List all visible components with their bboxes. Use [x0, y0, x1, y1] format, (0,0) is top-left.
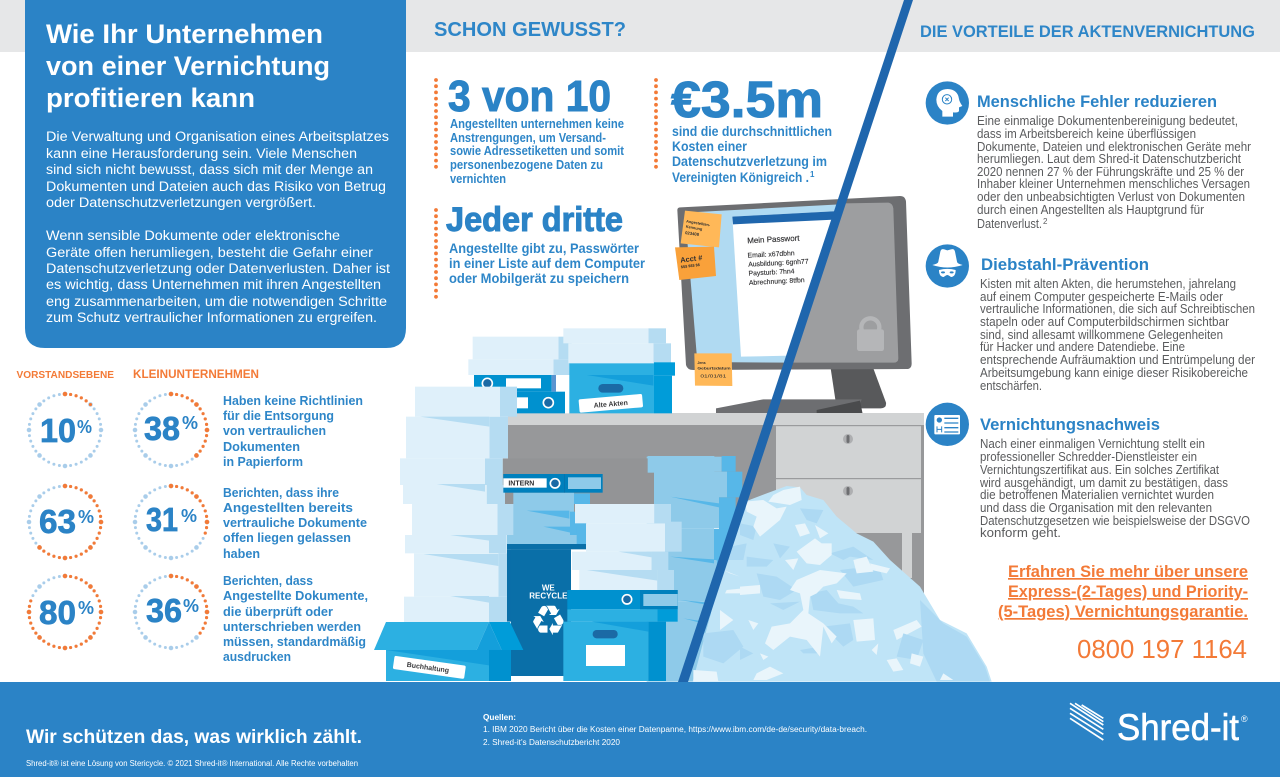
text: diebstahl [980, 277, 1255, 393]
fact: 3 von 10: Angestellten unternehmen keine [450, 116, 624, 131]
intro text: Dokumenten und Dateien auch das Risiko von Betrug [46, 179, 386, 194]
intro text: zum Schutz vertraulicher Informationen zu ergreifen. [46, 310, 377, 325]
stat text: ausdrucken: ausdrucken [223, 649, 291, 664]
text: diebstahl: entschärfen. [980, 379, 1042, 393]
box: buchhaltung [374, 622, 523, 681]
logo: shred-it: Shred-it [1117, 707, 1240, 748]
password document [732, 211, 847, 357]
stat: 36 percent: % [183, 596, 199, 616]
text: vernichtungsnachweis: konform geht. [980, 526, 1061, 540]
fact: 3.5m: Vereinigten Königreich . [672, 169, 809, 185]
intro text: kann eine Herausforderung sein. Viele Menschen [46, 146, 357, 161]
stat: 63 percent: % [78, 507, 94, 527]
text: menschliche fehler: Datenverlust. [977, 217, 1042, 231]
call to action: Express-(2-Tages) und Priority- [1008, 582, 1248, 601]
password document: Abrechnung: 8tfbn [749, 277, 805, 287]
text: menschliche fehler: durch einen Angestellten als Hauptgrund für [977, 203, 1204, 217]
stat text: offen liegen [223, 485, 367, 561]
fact: 3 von 10: sowie Adressetiketten und somit [450, 143, 625, 158]
text: diebstahl: vertrauliche Informationen, die sich auf Schreibtischen [980, 302, 1255, 316]
sources: 2. Shred-it's Datenschutzbericht 2020 [483, 738, 621, 747]
column headings [16, 369, 259, 381]
logo: shred-it [1070, 703, 1248, 748]
stat: 31 percent [135, 486, 207, 558]
header band [0, 0, 1280, 52]
recycling bin: RECYCLE [529, 591, 568, 600]
text: vernichtungsnachweis: professioneller Schredder-Dienstleister ein [980, 450, 1197, 464]
sticky note: kennung [681, 211, 722, 247]
stat: 63 percent: 63 [39, 503, 76, 540]
intro text: Datenschutzverletzung oder Datenverlusten. Daher ist [46, 261, 390, 276]
panel: intro [25, 0, 406, 348]
column headings: KLEINUNTERNEHMEN [133, 369, 259, 381]
stat: 80 percent: % [78, 598, 94, 618]
stat text: ausdrucken: Berichten, dass [223, 573, 313, 588]
fact: 3.5m: Kosten einer [672, 138, 747, 154]
stat text: ausdrucken: unterschrieben werden [223, 619, 361, 634]
sources [483, 713, 867, 747]
text: vernichtungsnachweis: Vernichtungszertifikat aus. Ein solches Zertifikat [980, 463, 1219, 477]
stat text: ausdrucken [223, 573, 368, 664]
back paper stack [468, 337, 572, 375]
stat text: richtlinien [223, 393, 363, 469]
stat: 36 percent [135, 576, 207, 648]
intro text [46, 129, 390, 325]
stat text: ausdrucken: die überprüft oder [223, 604, 333, 619]
text: menschliche fehler: Eine einmalige Dokumentenbereinigung bedeutet, [977, 114, 1238, 128]
stat text: ausdrucken: Angestellte Dokumente, [223, 588, 368, 603]
sticky note: acct: $$$ $$$ $$ [681, 263, 701, 269]
text: menschliche fehler: herumliegen. Laut dem Shred-it Datenschutzbericht [977, 152, 1241, 166]
desk shadow block [503, 458, 654, 504]
rim and right side shreds [693, 543, 990, 682]
sticky note: geburtsdatum: Jens [697, 361, 706, 365]
text: vernichtungsnachweis: wird ausgehändigt, um damit zu bestätigen, dass [979, 476, 1228, 490]
call to action [998, 562, 1248, 621]
heading: schon gewusst: SCHON GEWUSST? [434, 19, 626, 41]
fact: 3.5m [656, 71, 832, 185]
monitor stand [831, 368, 886, 408]
copyright: Shred-it® ist eine Lösung von Stericycle. © 2021 Shred-it® International. Alle Rechte vorbehalten [26, 759, 358, 768]
illustration: stacks and boxes [374, 328, 714, 681]
box: unlabelled front [563, 590, 678, 681]
fact: 3 von 10: vernichten [450, 171, 506, 186]
centre shreds [740, 487, 890, 680]
stat text: richtlinien: von vertraulichen [223, 423, 326, 438]
sticky note: geburtsdatum [694, 353, 732, 386]
logo: shred-it: ® [1241, 714, 1248, 724]
text: menschliche fehler [977, 114, 1251, 231]
left paper stack [400, 387, 517, 622]
heading: vorteile: DIE VORTEILE DER AKTENVERNICHTUNG [920, 22, 1255, 41]
stat text: offen liegen: offen liegen gelassen [223, 530, 351, 545]
sources: 1. IBM 2020 Bericht über die Kosten einer Datenpanne, https://www.ibm.com/de-de/security/data-breach. [483, 725, 867, 734]
call to action: (5-Tages) Vernichtungsgarantie. [998, 602, 1248, 621]
sticky note: kennung: Angestellten- [686, 219, 711, 228]
sticky note: kennung: Kennung [685, 225, 703, 232]
call to action: Erfahren Sie mehr über unsere [1008, 562, 1248, 581]
stat text: ausdrucken: müssen, standardmäßig [223, 634, 366, 649]
text: diebstahl: für Hacker und andere Datendiebe. Eine [980, 340, 1185, 354]
text: vernichtungsnachweis: Nach einer einmaligen Vernichtung stellt ein [980, 437, 1205, 451]
sticky note: acct [675, 247, 716, 280]
phone number: 0800 197 1164 [1077, 634, 1247, 664]
binder: intern [503, 474, 603, 493]
icon: padlock [857, 318, 884, 351]
monitor frame [677, 196, 912, 370]
fact: jeder dritte: Jeder dritte [446, 201, 623, 239]
icon: certificate [926, 403, 969, 446]
text: menschliche fehler: Dokumente, Dateien und elektronischen Geräte mehr [977, 140, 1251, 154]
stat text: offen liegen: Angestellten bereits [223, 500, 353, 515]
password document: Email: x67dbhn [747, 250, 795, 260]
text: diebstahl: Kisten mit alten Akten, die herumstehen, jahrelang [980, 277, 1236, 291]
recycling bin [507, 544, 586, 676]
text: menschliche fehler: 2 [1043, 217, 1048, 226]
sticky note: kennung: 023408 [685, 230, 700, 237]
stat: 38 percent [135, 394, 207, 466]
intro text: eng zusammenarbeiten, um die notwendigen Schritte [46, 294, 387, 309]
fact: 3 von 10 [436, 72, 625, 186]
title: von einer Vernichtung [46, 51, 330, 81]
stat: 36 percent: 36 [146, 592, 182, 629]
mid stack [507, 493, 590, 544]
text: vernichtungsnachweis: die betroffenen Materialien vernichtet wurden [980, 488, 1214, 502]
tagline: Wir schützen das, was wirklich zählt. [26, 727, 362, 748]
sources: Quellen: [483, 713, 516, 722]
text: vernichtungsnachweis [979, 437, 1250, 540]
text: menschliche fehler: dass im Arbeitsbereich keine überflüssigen [977, 127, 1196, 141]
stat text: richtlinien: Dokumenten [223, 439, 300, 454]
text: diebstahl: sind, sind allesamt willkommene Gelegenheiten [980, 328, 1223, 342]
password document: Ausbildung: 6gnh77 [748, 259, 809, 269]
fact: jeder dritte: Angestellte gibt zu, Passwörter [449, 240, 639, 256]
heading: vernichtungsnachweis: Vernichtungsnachweis [980, 415, 1160, 434]
back binders [474, 375, 569, 413]
intro text: Die Verwaltung und Organisation eines Arbeitsplatzes [46, 129, 389, 144]
stat text: offen liegen: haben [223, 546, 260, 561]
binder: intern: INTERN [508, 481, 534, 488]
text: diebstahl: stapeln oder auf Computerbildschirmen sichtbar [980, 315, 1229, 329]
stat text: richtlinien: Haben keine Richtlinien [223, 393, 363, 408]
fact: jeder dritte: oder Mobilgerät zu speichern [449, 270, 629, 286]
illustration: tall stack behind diagonal [647, 456, 742, 682]
fact: jeder dritte [436, 201, 645, 298]
password document: Mein Passwort [747, 234, 801, 245]
sticky note: acct: Acct # [680, 253, 703, 265]
stat: 10 percent [29, 394, 101, 466]
intro text: sind sich nicht bewusst, dass sich mit der Menge an [46, 162, 373, 177]
drawer knobs [843, 434, 853, 496]
intro text: Wenn sensible Dokumente oder elektronische [46, 228, 340, 243]
stat: 38 percent: % [182, 413, 198, 433]
fact: 3 von 10: personenbezogene Daten zu [450, 157, 603, 172]
stat: 10 percent: 10 [40, 412, 76, 449]
text: menschliche fehler: 2020 nennen 27 % der Führungskräfte und 25 % der [977, 165, 1244, 179]
text: menschliche fehler: oder den unbeabsichtigten Verlust von Dokumenten [977, 190, 1245, 204]
sticky note: geburtsdatum: 01/01/81 [700, 373, 727, 379]
text: vernichtungsnachweis: Datenschutzgesetzen wie beispielsweise der DSGVO [980, 514, 1250, 528]
text: vernichtungsnachweis: und dass die Organisation mit den relevanten [980, 501, 1212, 515]
stat: 63 percent [29, 486, 101, 558]
screen [685, 204, 847, 363]
stat text: richtlinien: in Papierform [223, 454, 303, 469]
sticky note: geburtsdatum: Geburtsdatum [697, 367, 732, 371]
illustration: shredded paper pile [693, 486, 992, 682]
title: Wie Ihr Unternehmen [46, 19, 323, 49]
fact: 3.5m: Datenschutzverletzung im [672, 153, 827, 169]
heading: diebstahl: Diebstahl-Prävention [981, 255, 1149, 274]
illustration: desk [508, 413, 924, 665]
stat text: offen liegen: vertrauliche Dokumente [223, 515, 367, 530]
diagonal divider [678, 0, 913, 682]
text: diebstahl: Arbeitsumgebung kann einige dieser Risikobereiche [980, 366, 1248, 380]
column headings: VORSTANDSEBENE [16, 369, 114, 381]
stat: 10 percent: % [77, 417, 92, 437]
box: alte akten [563, 328, 675, 413]
box: alte akten: Alte Akten [593, 400, 628, 410]
title: profitieren kann [46, 83, 255, 113]
text: diebstahl: auf einem Computer gespeicherte E-Mails oder [980, 290, 1223, 304]
stat: 31 percent: 31 [146, 501, 178, 538]
icon: spy [926, 244, 969, 288]
stat text: richtlinien: für die Entsorgung [223, 408, 334, 423]
fact: 3 von 10: Anstrengungen, um Versand- [450, 130, 606, 145]
icon: recycling symbol: ♻ [530, 596, 567, 645]
locked screen area [791, 203, 898, 363]
fact: 3.5m: 1 [810, 170, 815, 179]
illustration: monitor [675, 196, 912, 414]
stat text: offen liegen: Berichten, dass ihre [223, 485, 339, 500]
intro text: es wichtig, dass Unternehmen mit ihren Angestellten [46, 277, 381, 292]
stat: 80 percent [29, 576, 101, 648]
password document: Paysturb: 7hn4 [748, 268, 795, 278]
box: buchhaltung: Buchhaltung [406, 662, 449, 675]
fact: jeder dritte: in einer Liste auf dem Computer [449, 255, 645, 271]
heading: menschliche fehler: Menschliche Fehler reduzieren [977, 92, 1217, 111]
icon: head with error mark [926, 81, 969, 125]
text: diebstahl: entsprechende Aufräumaktion und Entrümpelung der [980, 353, 1255, 367]
stat: 31 percent: % [181, 506, 197, 526]
fact: 3.5m: €3.5m [671, 71, 823, 128]
intro text: Geräte offen herumliegen, besteht die Gefahr einer [46, 245, 374, 260]
footer [0, 682, 1280, 777]
intro text: oder Datenschutzverletzungen vergrößert. [46, 195, 316, 210]
title [46, 19, 330, 113]
stat: 80 percent: 80 [39, 594, 76, 631]
recycling bin: WE [542, 584, 555, 593]
front paper stack [572, 504, 682, 590]
stat: 38 percent: 38 [144, 410, 180, 447]
text: menschliche fehler: Inhaber kleiner Unternehmen menschliches Versagen [977, 177, 1250, 191]
fact: 3.5m: sind die durchschnittlichen [672, 123, 832, 139]
fact: 3 von 10: 3 von 10 [448, 72, 611, 121]
